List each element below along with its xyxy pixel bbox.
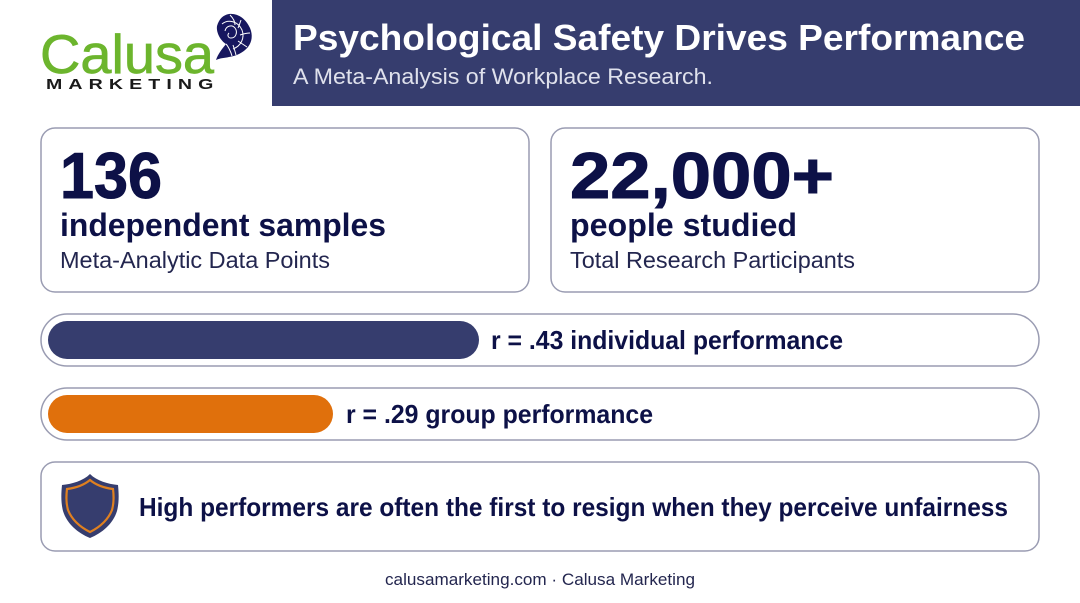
stat label: people studied [570,207,797,243]
stat number 136: 136 [60,139,162,212]
logo wordmark Marketing: MARKETING [46,76,213,92]
icon: nautilus shell [216,14,252,60]
stat label: independent samples [60,207,386,243]
logo: Calusa Marketing [40,14,252,92]
stat description: Total Research Participants [570,247,855,273]
callout text: High performers are often the first to resign when they perceive unfairness [139,492,1008,522]
title: Psychological Safety Drives Performance [293,17,1025,58]
stat description: Meta-Analytic Data Points [60,247,330,273]
bar [48,395,333,433]
header banner [272,0,1080,106]
footer: calusamarketing.com · Calusa Marketing [385,570,695,589]
bar chart: group performance [41,388,1039,440]
stat number 22,000+: 22,000+ [570,139,834,212]
panel: independent samples [41,128,529,292]
logo wordmark Calusa: Calusa [40,23,214,85]
icon: shield [61,474,119,538]
bar label: r = .29 group performance [346,399,653,429]
bar chart: individual performance [41,314,1039,366]
callout: high performers [41,462,1039,551]
subtitle: A Meta-Analysis of Workplace Research. [293,64,713,89]
bar [48,321,479,359]
panel: people studied [551,128,1039,292]
bar label: r = .43 individual performance [491,325,843,355]
